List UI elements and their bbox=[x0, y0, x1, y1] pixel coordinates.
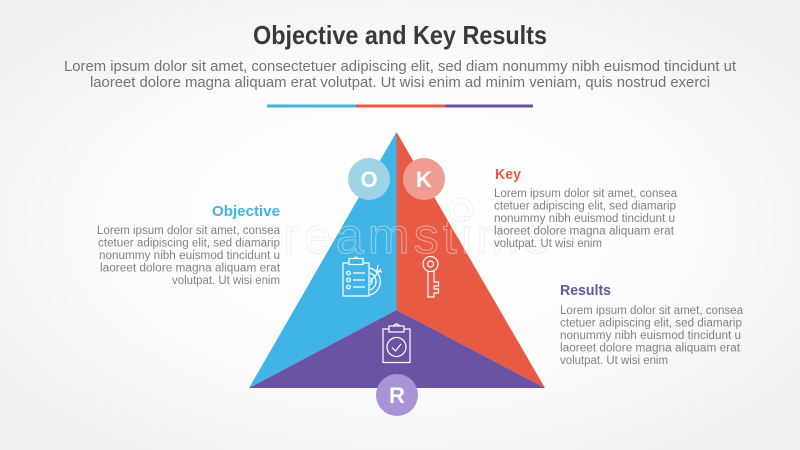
text block: objective: ctetuer adipiscing elit, sed diamarip bbox=[98, 238, 280, 250]
segment: objective bbox=[249, 132, 396, 388]
text block: objective: nonummy nibh euismod tincidunt u bbox=[99, 250, 280, 262]
text block: results: volutpat. Ut wisi enim bbox=[560, 355, 668, 367]
subtitle text bbox=[64, 59, 736, 91]
tricolor divider bbox=[267, 104, 533, 108]
text block: results bbox=[560, 282, 744, 367]
badge: O: O bbox=[360, 167, 378, 192]
badge: K bbox=[403, 158, 445, 200]
text block: objective bbox=[97, 203, 281, 287]
text block: objective: laoreet dolore magna aliquam erat bbox=[100, 262, 281, 274]
text block: results: laoreet dolore magna aliquam erat bbox=[560, 342, 741, 354]
text block: key: ctetuer adipiscing elit, sed diamarip bbox=[494, 200, 676, 212]
badge: R: R bbox=[389, 383, 405, 408]
text block: key: Lorem ipsum dolor sit amet, consea bbox=[494, 188, 678, 200]
heading: key: Key bbox=[495, 166, 522, 183]
text block: results: Lorem ipsum dolor sit amet, consea bbox=[560, 305, 744, 317]
text block: key: volutpat. Ut wisi enim bbox=[494, 238, 602, 250]
text block: results: ctetuer adipiscing elit, sed diamarip bbox=[560, 318, 742, 330]
badge: R bbox=[376, 374, 418, 416]
subtitle text: laoreet dolore magna aliquam erat volutpat. Ut wisi enim ad minim veniam, quis nostrud exerci bbox=[90, 75, 710, 91]
segment: results bbox=[249, 310, 545, 388]
watermark: reamstime bbox=[283, 208, 550, 264]
text block: objective: Lorem ipsum dolor sit amet, consea bbox=[97, 225, 281, 237]
text block: key: laoreet dolore magna aliquam erat bbox=[494, 226, 675, 238]
heading: objective: Objective bbox=[212, 203, 280, 220]
icon: key bbox=[423, 256, 438, 297]
segment: key bbox=[396, 132, 545, 388]
triangle diagram bbox=[249, 132, 545, 388]
text block: objective: volutpat. Ut wisi enim bbox=[172, 275, 280, 287]
icon: objective clipboard and target bbox=[343, 257, 382, 296]
text block: key bbox=[494, 166, 678, 250]
heading: results: Results bbox=[560, 282, 611, 299]
text block: key: nonummy nibh euismod tincidunt u bbox=[494, 213, 675, 225]
badge: K: K bbox=[416, 167, 432, 192]
text block: results: nonummy nibh euismod tincidunt u bbox=[560, 330, 741, 342]
title: Objective and Key Results bbox=[253, 20, 547, 50]
badge: O bbox=[348, 158, 390, 200]
subtitle text: Lorem ipsum dolor sit amet, consectetuer adipiscing elit, sed diam nonummy nibh euismod tincidunt ut bbox=[64, 59, 736, 75]
icon: results clipboard with check bbox=[383, 324, 410, 362]
